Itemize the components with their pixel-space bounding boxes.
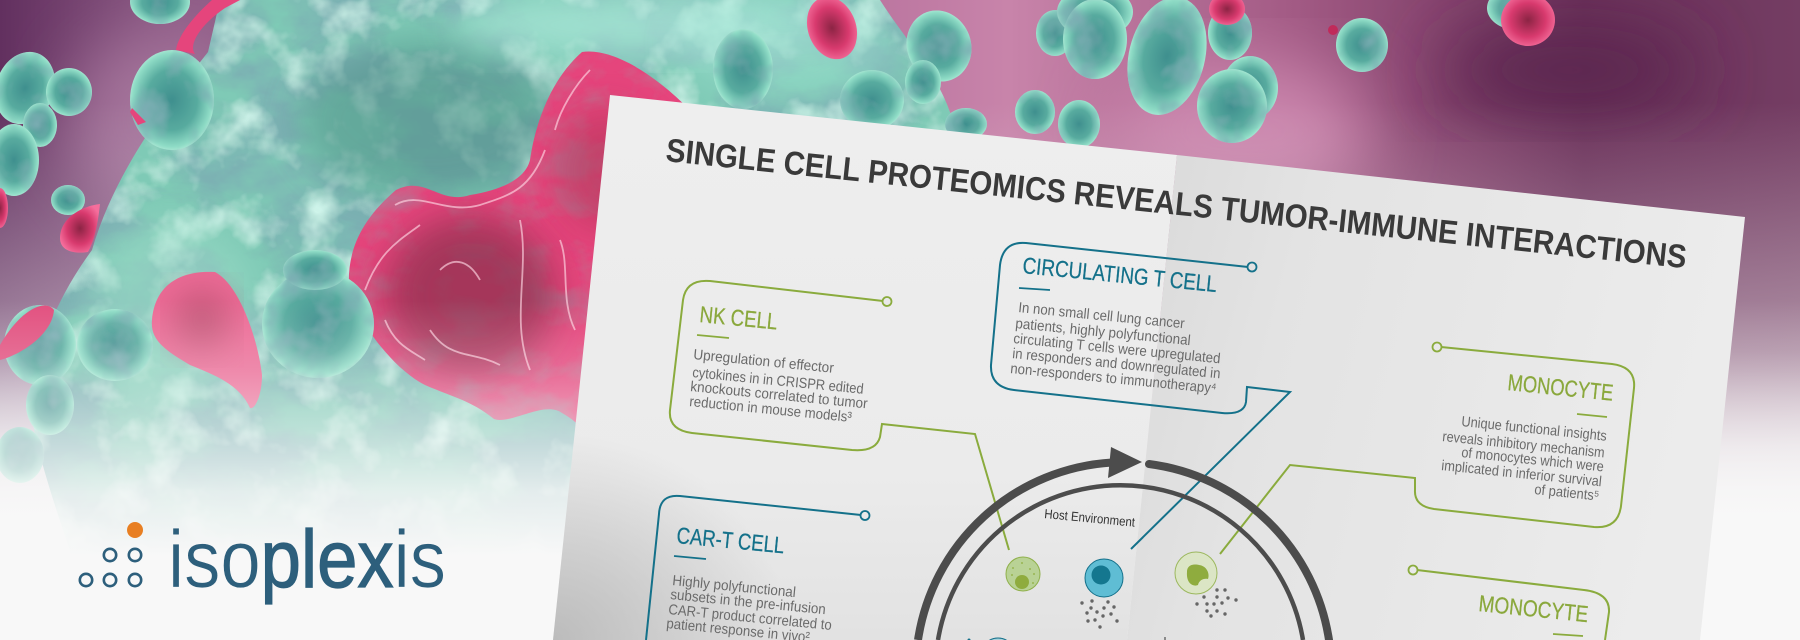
lower monocyte heading: MONOCYTE	[1477, 590, 1590, 627]
NK cell text: knockouts correlated to tumor	[690, 379, 868, 412]
inner circle arc	[938, 485, 1303, 640]
diagram: host environment cycle	[918, 447, 1329, 640]
small teal cells	[0, 0, 1547, 483]
panel: monocyte upper	[1220, 342, 1634, 554]
CAR-T heading: CAR-T CELL	[676, 522, 786, 558]
white fade over the lower area	[0, 290, 1800, 640]
outer cycle arc with arrow	[918, 447, 1329, 640]
NK cell text	[689, 347, 868, 426]
panel: monocyte lower	[1408, 566, 1609, 640]
monocyte text: of monocytes which were	[1461, 445, 1604, 475]
monocyte callout outline	[1220, 347, 1634, 554]
CAR-T text: CAR-T product correlated to	[668, 602, 832, 634]
monocyte text: Unique functional insights	[1461, 414, 1607, 445]
monocyte heading: MONOCYTE	[1506, 369, 1615, 406]
monocyte text	[1441, 414, 1607, 505]
monocyte text: reveals inhibitory mechanism	[1442, 429, 1605, 461]
T cell icon	[1085, 559, 1123, 597]
circulating T cell text: In non small cell lung cancer	[1018, 300, 1186, 332]
poster title: SINGLE CELL PROTEOMICS REVEALS TUMOR-IMMUNE INTERACTIONS	[664, 131, 1689, 275]
NK cell text: reduction in mouse models³	[689, 394, 853, 426]
monocyte icon	[1175, 552, 1217, 594]
circulating T cell text	[1010, 300, 1221, 397]
CAR-T callout outline	[646, 496, 861, 640]
panel: CAR-T cell	[646, 496, 870, 640]
big tumor cell mass	[32, 0, 950, 530]
NK cell heading: NK CELL	[699, 301, 779, 334]
poster sheet	[553, 95, 1745, 640]
lower monocyte callout outline	[1417, 570, 1609, 640]
cytokine dots under T cell	[1080, 599, 1119, 629]
monocyte text: of patients⁵	[1534, 482, 1600, 505]
small pink cells	[0, 0, 1555, 408]
circulating T cell callout outline	[991, 243, 1290, 549]
NK cell callout outline	[670, 281, 1009, 550]
logo wordmark: isoplexis	[168, 514, 446, 605]
pale pink teardrop cell	[152, 272, 262, 408]
CAR-T text: Highly polyfunctional	[672, 573, 797, 601]
circulating T cell text: non-responders to immunotherapy⁴	[1010, 361, 1217, 397]
logo icon: dots	[80, 522, 143, 586]
host environment label: Host Environment	[1044, 506, 1136, 530]
logo: isoplexis	[80, 514, 446, 605]
cytokine dots under monocyte	[1195, 588, 1238, 618]
circulating T cell text: circulating T cells were upregulated	[1013, 331, 1221, 367]
CAR-T cell icon	[968, 637, 1165, 640]
CAR-T text	[666, 573, 832, 640]
NK cell icon	[1006, 557, 1040, 591]
monocyte text: implicated in inferior survival	[1441, 458, 1602, 490]
pink tumor lobe	[348, 52, 682, 422]
CAR-T text: subsets in the pre-infusion	[670, 587, 826, 618]
NK cell text: Upregulation of effector	[693, 347, 835, 377]
circulating T cell text: in responders and downregulated in	[1012, 346, 1221, 382]
circulating T cell heading: CIRCULATING T CELL	[1022, 252, 1218, 297]
NK cell text: cytokines in in CRISPR edited	[692, 365, 864, 398]
panel: NK cell	[670, 281, 1009, 550]
circulating T cell text: patients, highly polyfunctional	[1015, 316, 1191, 349]
panel: circulating T cell	[991, 243, 1290, 549]
